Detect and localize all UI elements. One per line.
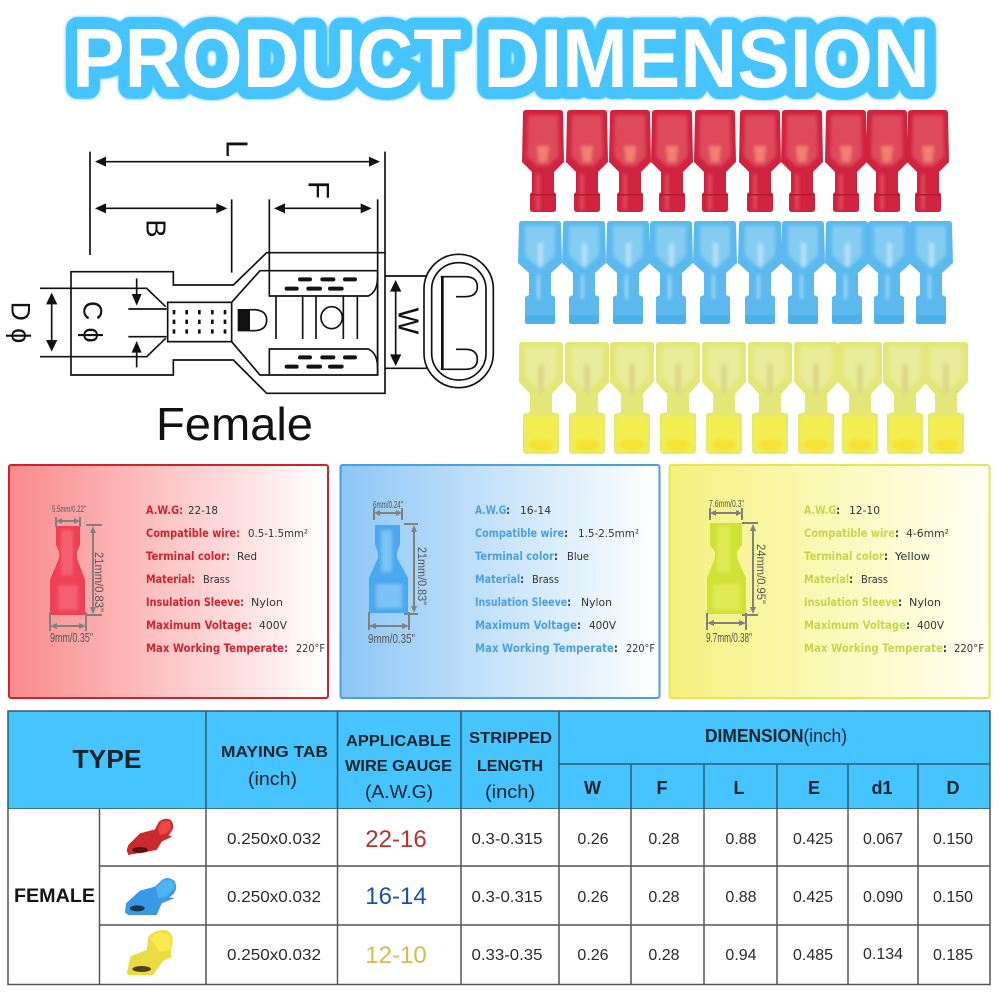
red spec list — [146, 503, 325, 655]
row: 16-14: 0.090 — [863, 889, 903, 906]
table header: APPLICABLE — [346, 733, 451, 750]
yellow spec list: 400V — [917, 619, 944, 632]
red terminal with dimensions — [50, 504, 106, 645]
blue spec list: 220°F — [626, 642, 655, 655]
table header: LENGTH — [477, 758, 543, 775]
technical diagram: female terminal — [6, 140, 493, 393]
row: 12-10: 0.26 — [577, 947, 609, 964]
row: 12-10: 0.250x0.032 — [227, 947, 321, 964]
blue spec list: Material: — [475, 572, 524, 586]
row: 16-14: 0.28 — [648, 889, 680, 906]
blue spec list: Nylon — [581, 596, 612, 609]
table header: (inch) — [248, 769, 297, 789]
red terminal with dimensions: 5.5mm/0.22" — [52, 504, 86, 514]
yellow spec list: Brass — [861, 573, 888, 586]
table body: FEMALE — [14, 886, 95, 907]
row: 22-16: 0.150 — [933, 831, 973, 848]
table header — [8, 711, 990, 809]
row: 22-16: 0.28 — [648, 831, 680, 848]
dimension B: B — [141, 219, 172, 238]
blue spec list: Blue — [567, 550, 589, 563]
row: 22-16: 0.26 — [577, 831, 609, 848]
row: 22-16: 0.067 — [863, 831, 903, 848]
blue spec list: 16-14 — [520, 504, 551, 517]
row: 12-10: 12-10 — [365, 942, 427, 969]
yellow spec list: 12-10 — [849, 504, 880, 517]
table header: (A.W.G) — [365, 782, 433, 802]
dimension D phi — [6, 293, 57, 352]
row: 12-10: 0.28 — [648, 947, 680, 964]
yellow spec list: Maximum Voltage: — [804, 618, 910, 632]
table header: W — [584, 778, 601, 798]
yellow spec list: Max Working Temperate: — [804, 641, 947, 655]
row: 12-10: 0.94 — [725, 947, 757, 964]
blue terminal with dimensions: 6mm/0.24" — [373, 500, 403, 511]
yellow terminal with dimensions — [706, 499, 768, 645]
table header: D — [946, 778, 960, 798]
yellow terminal with dimensions: 24mm/0.95" — [754, 544, 768, 604]
icon: red terminal — [127, 819, 173, 855]
row: 16-14: 0.150 — [933, 889, 973, 906]
yellow spec list: Terminal color: — [804, 549, 888, 563]
title: PRODUCT DIMENSION — [72, 12, 930, 106]
row: 12-10: 0.33-0.35 — [472, 947, 543, 964]
red spec list: 0.5-1.5mm² — [248, 527, 308, 540]
table header: E — [808, 778, 820, 798]
table header: L — [734, 778, 744, 798]
panel: yellow spec card — [670, 465, 990, 698]
blue spec list: Maximum Voltage: — [475, 618, 581, 632]
table header: WIRE GAUGE — [345, 758, 452, 775]
diagram caption: Female — [156, 398, 313, 450]
photo: blue connector row — [518, 221, 953, 324]
photo: red connector row — [522, 110, 949, 212]
red spec list: 220°F — [296, 642, 325, 655]
yellow spec list: Nylon — [909, 596, 941, 609]
row: 16-14: 0.88 — [725, 889, 757, 906]
red spec list: A.W.G: — [146, 503, 183, 517]
red spec list: Terminal color: — [146, 549, 230, 563]
red spec list: Maximum Voltage: — [146, 618, 252, 632]
table header: F — [656, 778, 668, 798]
red spec list: Material: — [146, 572, 195, 586]
blue spec list: 1.5-2.5mm² — [578, 527, 639, 540]
row: 22-16: 0.88 — [725, 831, 757, 848]
yellow spec list: Yellow — [894, 550, 930, 563]
dimension W: W — [391, 308, 423, 335]
icon: yellow terminal — [127, 930, 173, 975]
blue spec list: Brass — [532, 573, 559, 586]
icon: blue terminal — [125, 878, 176, 915]
yellow spec list: 4-6mm² — [906, 527, 949, 540]
photo: yellow connector row — [519, 342, 968, 454]
terminal outline — [40, 253, 385, 393]
red terminal with dimensions: 9mm/0.35" — [50, 630, 93, 645]
row: 12-10 — [227, 942, 973, 969]
row: 22-16 — [227, 826, 973, 853]
row: 16-14: 0.250x0.032 — [227, 889, 321, 906]
row: 22-16: 0.425 — [793, 831, 833, 848]
row: 16-14 — [227, 883, 973, 910]
red terminal with dimensions: 21mm/0.83" — [92, 552, 106, 612]
blue spec list: Insulation Sleeve: — [475, 595, 571, 609]
end view — [424, 254, 493, 388]
row: 12-10: 0.134 — [863, 946, 903, 963]
blue spec list: 400V — [589, 619, 616, 632]
blue terminal with dimensions: 9mm/0.35" — [368, 631, 415, 646]
dimension D phi: D ϕ — [6, 302, 36, 343]
red spec list: 400V — [259, 619, 287, 632]
blue spec list: Terminal color: — [475, 549, 558, 563]
yellow spec list: 220°F — [954, 642, 984, 655]
table body — [8, 809, 990, 984]
yellow terminal with dimensions: 9.7mm/0.38" — [706, 630, 752, 645]
table header: (inch) — [485, 782, 535, 802]
specification table — [8, 711, 990, 984]
table header: TYPE — [72, 744, 142, 774]
row: 12-10: 0.185 — [933, 947, 973, 964]
blue spec list — [475, 503, 655, 655]
dimension C phi — [77, 278, 142, 367]
table header: d1 — [871, 778, 893, 798]
red spec list: Nylon — [251, 596, 283, 609]
red spec list: Brass — [203, 573, 230, 586]
dimension F — [269, 181, 378, 375]
panel: red spec card — [9, 465, 328, 698]
row: 22-16: 0.250x0.032 — [227, 831, 321, 848]
blue spec list: A.W.G: — [475, 503, 510, 517]
yellow spec list: Material: — [804, 572, 853, 586]
red spec list: Max Working Temperate: — [146, 641, 288, 655]
yellow spec list: Compatible wire: — [804, 526, 899, 540]
dimension B — [95, 199, 232, 273]
yellow spec list: Insulation Sleeve: — [804, 595, 902, 609]
yellow terminal with dimensions: 7.6mm/0.3" — [709, 499, 744, 510]
red spec list: Compatible wire: — [146, 526, 240, 540]
row: 12-10: 0.485 — [793, 947, 833, 964]
row: 16-14: 0.425 — [793, 889, 833, 906]
row: 16-14: 0.26 — [577, 889, 609, 906]
yellow spec list — [804, 503, 984, 655]
panel: blue spec card — [340, 465, 660, 698]
red spec list: 22-18 — [188, 504, 218, 517]
dimension L — [90, 140, 385, 255]
blue spec list: Max Working Temperate: — [475, 641, 618, 655]
row: 22-16: 0.3-0.315 — [472, 831, 543, 848]
dimension F: F — [301, 181, 334, 199]
dimension L: L — [220, 140, 254, 157]
row: 16-14: 16-14 — [365, 883, 427, 910]
blue terminal with dimensions — [368, 500, 429, 646]
red spec list: Red — [237, 550, 257, 563]
red spec list: Insulation Sleeve: — [146, 595, 244, 609]
row: 16-14: 0.3-0.315 — [472, 889, 543, 906]
row: 22-16: 22-16 — [365, 826, 427, 853]
blue spec list: Compatible wire: — [475, 526, 568, 540]
blue terminal with dimensions: 21mm/0.83" — [415, 547, 429, 605]
dimension C phi: C ϕ — [77, 301, 107, 343]
dimension W — [385, 276, 427, 368]
table header: DIMENSION(inch) — [705, 726, 847, 746]
yellow spec list: A.W.G: — [804, 503, 840, 517]
table header: STRIPPED — [469, 730, 552, 747]
table header: MAYING TAB — [221, 744, 328, 761]
